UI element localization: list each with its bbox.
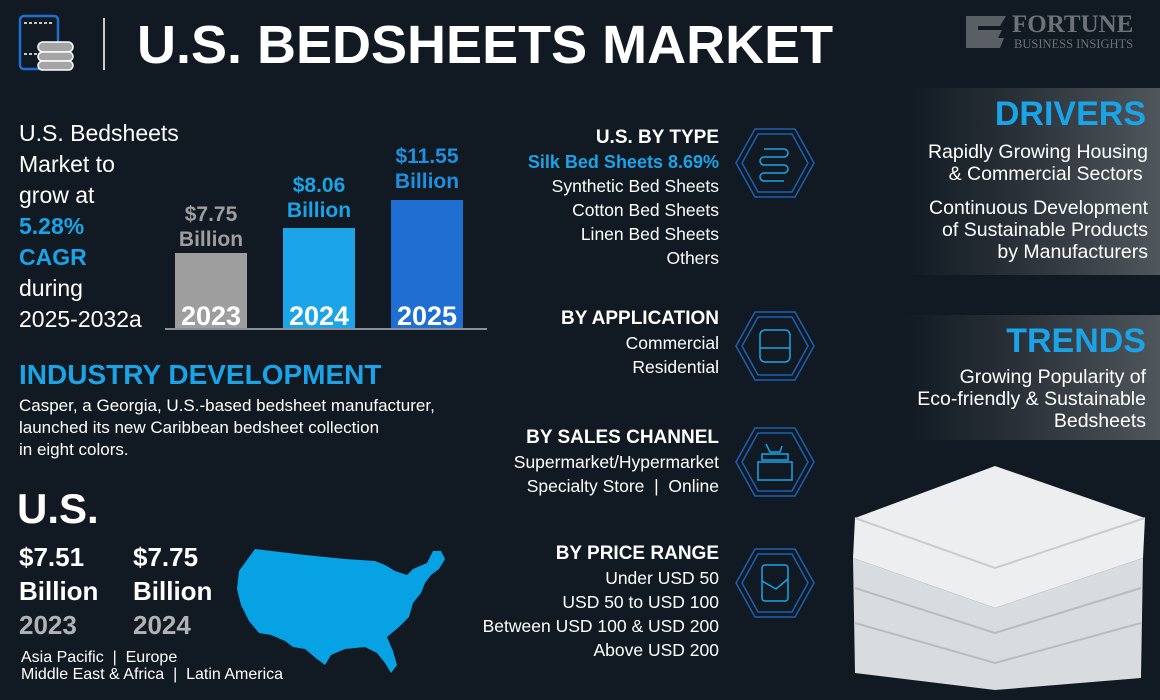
- panel: drivers: [905, 88, 1160, 275]
- stat 2023: Billion: [19, 576, 98, 606]
- panel: drivers: & Commercial Sectors: [949, 163, 1143, 185]
- stat 2024: Billion: [133, 576, 212, 606]
- bar chart: $7.75: [185, 203, 237, 226]
- text: CAGR statement: Market to: [19, 151, 115, 177]
- panel: trends: [905, 315, 1160, 440]
- panel: drivers: Continuous Development: [929, 197, 1148, 219]
- text: regions: Middle East & Africa | Latin America: [21, 666, 283, 683]
- bar chart: $8.06: [293, 174, 345, 197]
- text: industry development: [19, 396, 435, 459]
- section: by type: [528, 127, 719, 268]
- panel: trends: Eco-friendly & Sustainable: [917, 388, 1146, 410]
- panel: drivers: DRIVERS: [995, 95, 1146, 133]
- section: by sales channel: [514, 427, 719, 496]
- panel: trends: TRENDS: [1006, 322, 1146, 360]
- bar chart: Billion: [287, 199, 351, 222]
- section: by application: Residential: [632, 357, 719, 377]
- section: by price range: [483, 543, 719, 660]
- text: regions: [21, 649, 284, 683]
- section: by price range: Between USD 100 & USD 200: [483, 616, 719, 636]
- section: by price range: Above USD 200: [594, 640, 719, 660]
- icon: hex type: [735, 128, 815, 198]
- section: by type: Others: [666, 248, 719, 268]
- logo: Fortune Business Insights: BUSINESS INSIGHTS: [1014, 37, 1133, 51]
- bar 2025: 2025: [397, 301, 457, 331]
- bar chart: $11.55: [395, 145, 459, 168]
- section: by type: Synthetic Bed Sheets: [552, 176, 719, 196]
- icon: hex price range: [735, 548, 815, 618]
- bar 2024: 2024: [289, 301, 349, 331]
- stat 2023: 2023: [19, 610, 77, 640]
- panel: drivers: by Manufacturers: [997, 241, 1148, 263]
- bar chart: [165, 145, 487, 331]
- section: by application: BY APPLICATION: [561, 308, 719, 329]
- panel: drivers: of Sustainable Products: [942, 219, 1148, 241]
- image: folded bedsheets: [853, 466, 1146, 690]
- bar chart: Billion: [395, 170, 459, 193]
- text: CAGR statement: grow at: [19, 182, 94, 208]
- stat 2024: 2024: [133, 610, 191, 640]
- bar 2023: [175, 253, 247, 328]
- bar chart: Billion: [179, 228, 243, 251]
- section: by sales channel: Supermarket/Hypermarket: [514, 452, 719, 472]
- icon: logo bedsheets: [18, 14, 74, 71]
- text: industry development: in eight colors.: [19, 440, 129, 459]
- logo: Fortune Business Insights: [966, 11, 1133, 51]
- panel: trends: Bedsheets: [1054, 410, 1146, 432]
- text: CAGR statement: CAGR: [19, 244, 87, 270]
- bar 2023: 2023: [181, 301, 241, 331]
- section: by type: U.S. BY TYPE: [596, 127, 719, 148]
- panel: drivers: Rapidly Growing Housing: [928, 141, 1148, 163]
- logo: Fortune Business Insights: FORTUNE: [1012, 11, 1133, 38]
- heading: U.S.: U.S.: [17, 485, 99, 532]
- section: by type: Linen Bed Sheets: [581, 224, 719, 244]
- map: USA: [237, 549, 445, 673]
- icon: hex sales channel: [735, 427, 815, 497]
- text: industry development: Casper, a Georgia, U.S.-based bedsheet manufacturer,: [19, 396, 435, 415]
- text: CAGR statement: U.S. Bedsheets: [19, 120, 179, 146]
- bar 2024: [283, 228, 355, 328]
- section: by price range: BY PRICE RANGE: [556, 543, 719, 564]
- section: by price range: USD 50 to USD 100: [562, 592, 719, 612]
- title: U.S. BEDSHEETS MARKET: [137, 15, 833, 75]
- section: by application: Commercial: [626, 333, 719, 353]
- section: by sales channel: BY SALES CHANNEL: [526, 427, 719, 448]
- section: by application: [561, 308, 719, 377]
- stat 2024: [133, 542, 212, 640]
- section: by sales channel: Specialty Store | Online: [527, 476, 719, 496]
- text: CAGR statement: [19, 120, 179, 332]
- stat 2023: [19, 542, 98, 640]
- bar 2025: [391, 200, 463, 328]
- section: by type: Cotton Bed Sheets: [572, 200, 719, 220]
- text: regions: Asia Pacific | Europe: [21, 649, 177, 666]
- text: CAGR statement: during: [19, 275, 83, 301]
- text: industry development: launched its new Caribbean bedsheet collection: [19, 418, 379, 437]
- icon: hex application: [735, 311, 815, 381]
- text: CAGR statement: 2025-2032a: [19, 306, 142, 332]
- stat 2024: $7.75: [133, 542, 198, 572]
- section: by price range: Under USD 50: [605, 568, 719, 588]
- text: CAGR statement: 5.28%: [19, 213, 84, 239]
- panel: trends: Growing Popularity of: [960, 366, 1146, 388]
- section: by type: Silk Bed Sheets 8.69%: [528, 152, 719, 172]
- stat 2023: $7.51: [19, 542, 84, 572]
- heading: industry development: INDUSTRY DEVELOPMENT: [19, 359, 381, 390]
